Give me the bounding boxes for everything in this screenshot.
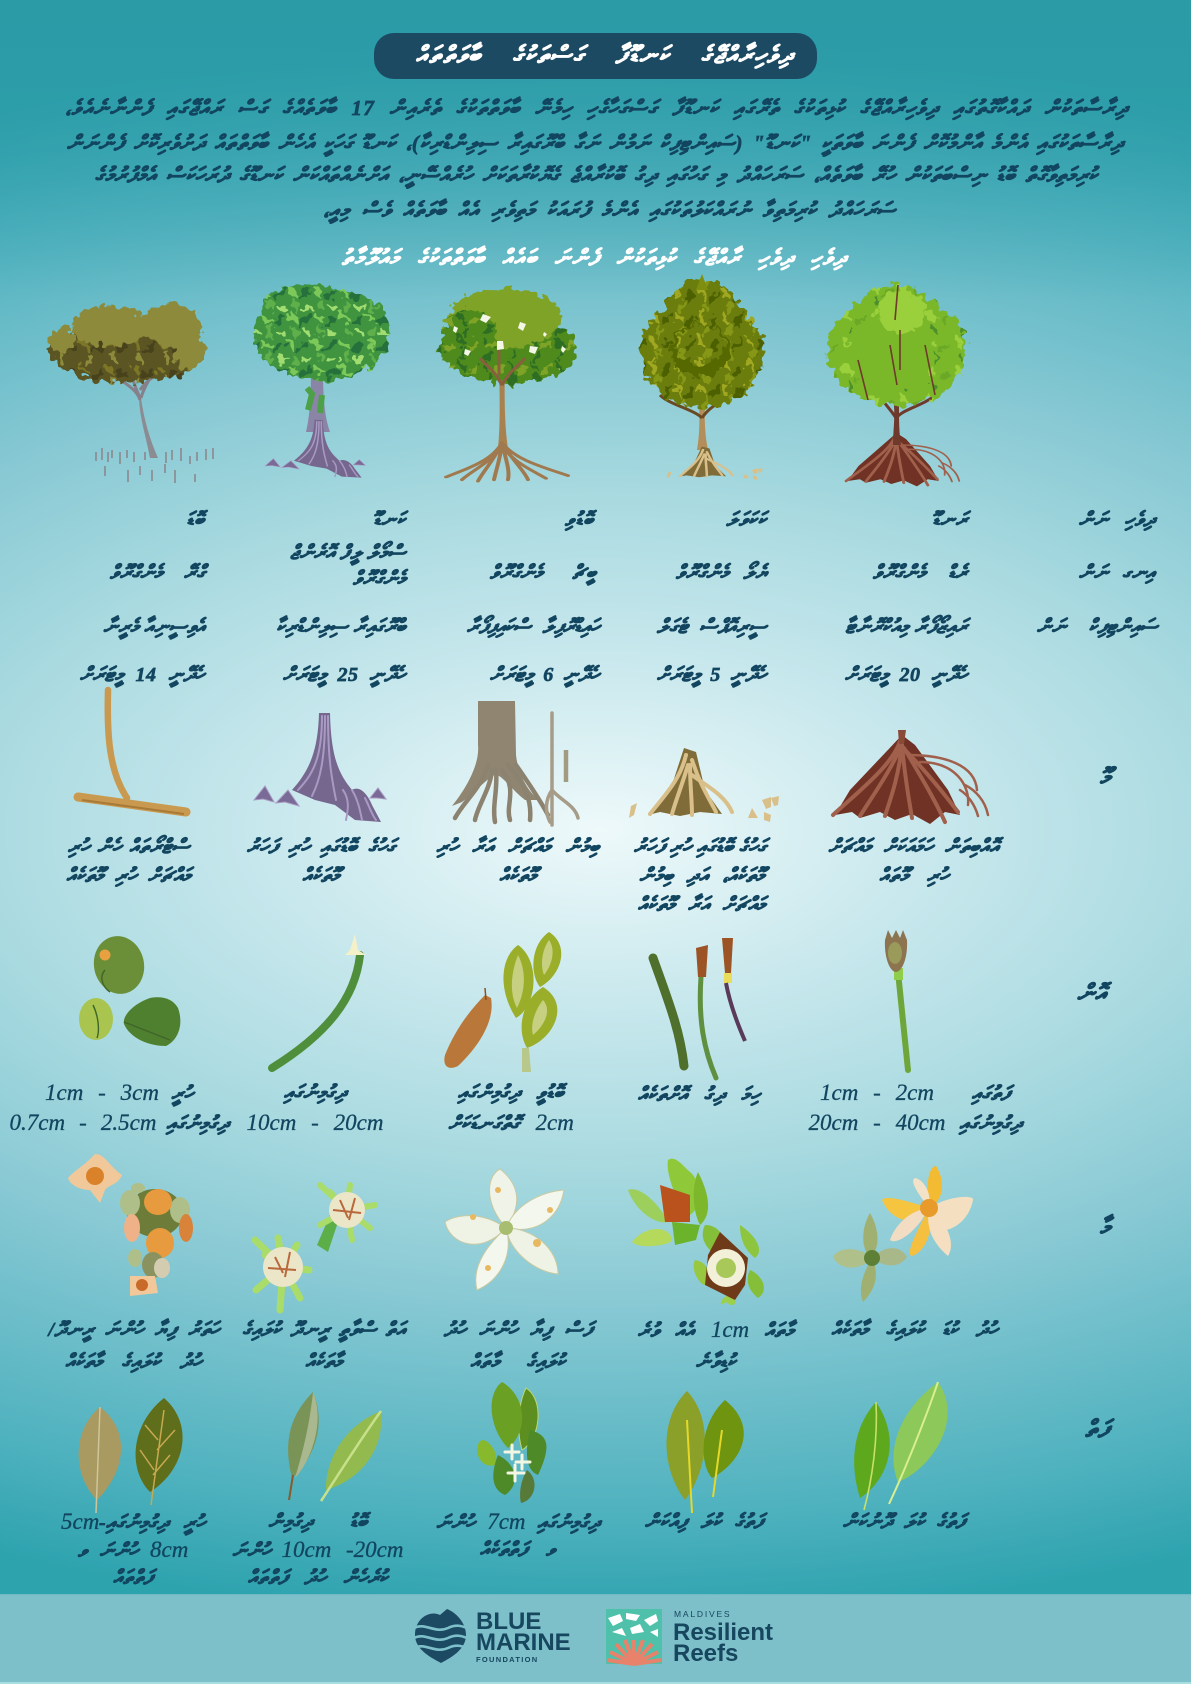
footer band <box>0 1594 1191 1683</box>
leaf caption column 5 <box>61 1509 208 1589</box>
fruit caption column 4 <box>246 1082 384 1135</box>
title: ދިވެހިރާއްޖޭގެ ކަނޑޫފާ ގަސްތަކުގެ ބާވަތްތައް <box>416 43 794 69</box>
logo text: Blue Marine: BLUE <box>476 1608 541 1635</box>
column 2 scientific: ސީރިއޮޕްސް ޓެގަލް <box>657 616 767 638</box>
column 5 names: ބޮޑަ <box>187 509 205 531</box>
column 4 english: މެންގްރޫވް <box>353 568 406 590</box>
root caption column 2 <box>634 836 771 916</box>
column 1 english: ރެޑް މެންގްރޫވް <box>873 562 968 584</box>
row labels: local name: ދިވެހި ނަން <box>1079 509 1155 531</box>
column 5 scientific: އެވިސީނިއާ މެރީނާ <box>104 616 205 638</box>
column 4 english: ސްމޯލް ލީފް އޮރެންޖް <box>290 542 406 564</box>
flower caption column 3: ފަސް ފިޔާ ހުންނަ ހުދު <box>444 1319 592 1341</box>
roots: column 4 buttress roots <box>254 713 386 822</box>
tree: column 1 bright green, red roots <box>827 284 967 486</box>
column 2 height: ހެދޭނީ 5 މީޓަރަށް <box>657 664 767 686</box>
leaf caption column 4: 10cm -20cm <box>282 1537 404 1562</box>
flower caption column 3: ކުލައިގެ މާތައް <box>470 1351 566 1373</box>
leaf caption column 1: ފަތުގެ ކުލަ ދޫނުކަން <box>843 1511 965 1533</box>
roots: column 2 plank and spreading tan roots <box>629 748 779 822</box>
root caption column 4: މޫތަކެއް <box>302 865 339 887</box>
root caption column 2: މޫތަކެއް، އަދި ބިމުން <box>640 865 764 887</box>
row label: flower: މާ <box>1100 1215 1111 1241</box>
leaves: column 2 <box>666 1391 744 1513</box>
root caption column 3 <box>436 835 601 887</box>
column 3 names: ބޮޑުވި <box>565 509 594 531</box>
column 4 height: ހެދޭނީ 25 މީޓަރަށް <box>283 664 406 686</box>
fruit caption column 3: ބޮޑުވީ ދިގުމިންގައި <box>458 1082 564 1104</box>
intro line 4: ސަރަހައްދު ކުރިމަތިވާ ނުރައްކަލުތަކުގައި އެންމެ ފުރައަކު މަތިވެރި އެއް ބާވަތެއް ވެސް މިއީ، <box>323 198 896 222</box>
leaf caption column 5: 5cm <box>61 1509 99 1534</box>
column 2 english: ޔެލޯ މެންގްރޫވް <box>676 562 767 584</box>
intro line 2: ދިރާސާތަކުގައި އެންމެ އާންމުކޮށް ފެންނަ ބާވަތަކީ "ކަނޑޫ" (ސައިންޓިފިކް ނަމުން ނަގާ ބްރޫގައިރާ ސިލިންޑްރިކާ)، ކަނޑޫ ގަހަކީ އެހެން ބާވަތްތައް ދަށުވެރިކޮށް ފެންނަން <box>67 131 1123 155</box>
fruit: column 5 <box>79 931 180 1046</box>
logo text: Resilient Reefs: Reefs <box>673 1640 738 1667</box>
column 1 height: ހެދޭނީ 20 މީޓަރަށް <box>845 664 968 686</box>
flower caption column 3 <box>443 1318 598 1373</box>
logo: Blue Marine emblem <box>414 1609 467 1663</box>
column 4 scientific: ބްރޫގައިރާ ސިލިންޑްރިކާ <box>276 616 406 638</box>
fruit caption column 1: ފަތުގައި <box>972 1083 1010 1105</box>
flower caption column 5 <box>46 1318 222 1373</box>
leaf caption column 3: 7cm <box>487 1509 526 1534</box>
fruit: column 2 <box>653 938 745 1078</box>
fruit caption column 2: ހިމަ ދިގު އޮށްތަކެއް <box>638 1084 760 1106</box>
row label: roots: މޫ <box>1100 765 1111 791</box>
fruit caption column 5: 1cm - 3cm <box>45 1080 159 1105</box>
flower caption column 4 <box>242 1318 408 1373</box>
logo text: Blue Marine: FOUNDATION <box>476 1655 538 1664</box>
tree: column 2 olive conical <box>640 274 764 480</box>
intro line 1: ދިރާސާތަކުން ދައްކާގޮތުގައި ދިވެހިރާއްޖޭގެ ކުޅިތަކުގެ ތެރޭގައި ކަނޑޫފާ ގަސްގަހާގެހި ހިމެނޭ ބާވަތްތަކުގެ ތެރެއިން 17 ބާވަތެއްގެ ގަސް ރައްޖޭގައި ފެންނާނެއެވެ، <box>65 96 1128 120</box>
fruit: column 1 <box>885 930 908 1070</box>
leaf caption column 5: 8cm <box>150 1537 188 1562</box>
fruit caption column 5 <box>10 1080 232 1135</box>
flower caption column 2: މާތައް އެއް ވުރެ <box>638 1320 794 1342</box>
leaves: column 1 <box>854 1382 948 1510</box>
leaves: column 5 <box>79 1398 183 1513</box>
flower caption column 5: ހަތަރު ފިޔާ ހުންނަ ރީނދޫ/ <box>48 1319 220 1341</box>
roots: column 5 cable root <box>78 690 186 814</box>
leaf caption column 4 <box>232 1511 404 1589</box>
leaf caption column 2: ފަތުގެ ކުލަ ފިއްކަން <box>645 1511 763 1533</box>
fruit caption column 1 <box>808 1080 1024 1135</box>
column 3 scientific: ހައިޑްރޮފިލާ ސްކައިފިފޯރާ <box>467 616 600 638</box>
flower caption column 4: މާތަކެއް <box>306 1351 342 1373</box>
leaf caption column 3 <box>436 1509 602 1561</box>
root caption column 3: މޫތަކެއް <box>500 865 536 887</box>
column 5 height: ހެދޭނީ 14 މީޓަރަށް <box>80 664 205 686</box>
title <box>374 33 817 79</box>
flower caption column 2: ކުޑިވާނެ <box>696 1351 736 1373</box>
flower: column 1 yellow <box>833 1166 973 1302</box>
fruit caption column 1: 20cm - 40cm <box>808 1110 946 1135</box>
leaves: column 4 <box>288 1392 381 1501</box>
flower: column 4 green-white <box>255 1185 375 1310</box>
logo: Resilient Reefs square <box>606 1609 662 1664</box>
flower: column 3 white <box>445 1169 564 1290</box>
flower caption column 5: ހުދު ކުލައިގެ މާތަކެއް <box>66 1351 202 1373</box>
root caption column 5: މައްޗަށް ހުރި މޫތަކެއް <box>66 865 192 887</box>
leaf caption column 4: ހުންނަ <box>232 1540 271 1562</box>
column 3 english: ބީޗް މެންގްރޫވް <box>490 562 596 584</box>
flower: column 5 orange cluster <box>68 1154 193 1296</box>
row label: fruit: އޮން <box>1077 981 1106 1007</box>
flower caption column 4: އަތް ސްވާތީ ރީނދޫ ކުލައިގެ <box>242 1319 406 1341</box>
flower caption column 2 <box>638 1317 798 1373</box>
root caption column 4: ގަހުގެ ބޮޑުގައި ހުރި ފަހަރު <box>247 836 395 858</box>
column 5 english: ގްރޭ މެންގްރޫވް <box>110 562 205 584</box>
leaf caption column 3: ދިގުމިނުގައި ހުންނަ <box>436 1512 600 1534</box>
leaf caption column 5: ހުރީ ދިގުމިނުގައި- <box>99 1512 205 1534</box>
flower caption column 1: ހުދު ކުޑަ ކުލައިގެ މާތަކެއް <box>832 1319 998 1341</box>
leaf caption column 5: ހުންނަ ވ <box>78 1540 138 1562</box>
leaf caption column 5: ފަތްތައް <box>113 1567 153 1589</box>
logo text: Resilient Reefs: MALDIVES <box>674 1609 731 1619</box>
row label: leaf: ފަތް <box>1085 1417 1109 1443</box>
row labels: scientific name: ސައިންޓިފިކް ނަން <box>1037 616 1158 638</box>
column 3 height: ހެދޭނީ 6 މީޓަރަށް <box>490 664 600 686</box>
fruit caption column 5: ހުރީ <box>172 1083 193 1105</box>
column 4 english <box>290 540 408 590</box>
tree: column 5 grey mangrove <box>48 303 213 483</box>
fruit caption column 5: ދިގުމިނުގައި <box>166 1113 228 1135</box>
leaf caption column 3: ވ ފަތްތަކެއް <box>480 1539 556 1561</box>
root caption column 1 <box>828 836 1004 887</box>
root caption column 2: ގަހުގެ ބޮޑުގައި ހުރި ފަހަރު <box>634 836 766 858</box>
root caption column 5: ސްޓްރޯތައް ހެން ހުރި <box>68 836 190 858</box>
root caption column 1: ހުރި މޫތައް <box>880 865 948 887</box>
row labels: english name: އިނގ ނަން <box>1079 562 1155 584</box>
tree: column 3 brown trunk, white blossoms <box>440 288 576 481</box>
flower caption column 2: 1cm <box>711 1317 749 1342</box>
logo text: Resilient Reefs: Resilient <box>673 1619 773 1646</box>
fruit caption column 4: ދިގުމިނުގައި <box>284 1082 346 1104</box>
column 4 names: ކަނޑޫ <box>373 509 406 531</box>
fruit caption column 3: 2cm <box>536 1110 574 1135</box>
fruit caption column 1: ދިގުމިނުގައި <box>959 1113 1022 1135</box>
leaf caption column 4: ބޮޑު ދިގުމިން <box>268 1511 368 1533</box>
fruit: column 4 <box>272 934 366 1068</box>
column 2 names: ކަކަވަލަ <box>726 509 767 531</box>
root caption column 3: ބިމުން މައްޗަށް އަރާ ހުރި <box>436 836 600 858</box>
logo text: Blue Marine: MARINE <box>476 1629 571 1656</box>
root caption column 1: އޮއްބިތަން ހަމައަކަށް މައްޗަށް <box>828 836 1000 858</box>
column 1 names: ރަނޑޫ <box>932 509 968 531</box>
tree: column 4 purple trunk <box>254 285 390 478</box>
fruit: column 3 <box>444 932 561 1072</box>
logo text: Blue Marine <box>476 1608 571 1664</box>
fruit caption column 1: 1cm - 2cm <box>820 1080 934 1105</box>
fruit caption column 3 <box>448 1082 574 1135</box>
fruit caption column 5: 0.7cm - 2.5cm <box>10 1110 156 1135</box>
leaf caption column 4: ކުރެހެން ހުދު ފަތްތައް <box>248 1567 388 1589</box>
flower: column 2 green-brown <box>628 1159 764 1305</box>
leaves: column 3 with blossoms <box>477 1382 546 1503</box>
root caption column 4 <box>246 836 400 887</box>
fruit caption column 3: ގޮތްގަނޑަކަށް <box>448 1113 519 1135</box>
roots: column 1 stilt roots <box>833 730 988 824</box>
logo text: Resilient Reefs <box>673 1609 773 1667</box>
intro line 3: ކުރިމަތިވާގޮތް ބޮޑު ނިސްބަތަކުން ހުރޭ ބާވަތެއް، ސަރަހައްދު މި ގަހުގައި ދިގު ބޮކުރާއްޖެ ގެޔޮކުރާތަކަށް ހުރެއްސޭނީ، އަށްނެއްތައްކަން ކަނޑޫގެ ދުރަހަކަސް އެމްފުރުމުގެ <box>95 163 1098 187</box>
root caption column 5 <box>66 834 194 887</box>
root caption column 2: މައްޗަށް އަރާ މޫތަކެއް <box>638 894 766 916</box>
fruit caption column 4: 10cm - 20cm <box>246 1110 384 1135</box>
roots: column 3 stump with branching roots <box>452 701 578 825</box>
column 1 scientific: ރައިޒޯފޯރާ މިއުކްރޮނާޓާ <box>845 616 968 638</box>
subtitle: ދިވެހި ދިވެހި ރާއްޖޭގެ ކުޅިތަކުން ފެންނަ ބައެއް ބާވަތްތަކުގެ މައުލޫމާތު <box>342 245 847 270</box>
